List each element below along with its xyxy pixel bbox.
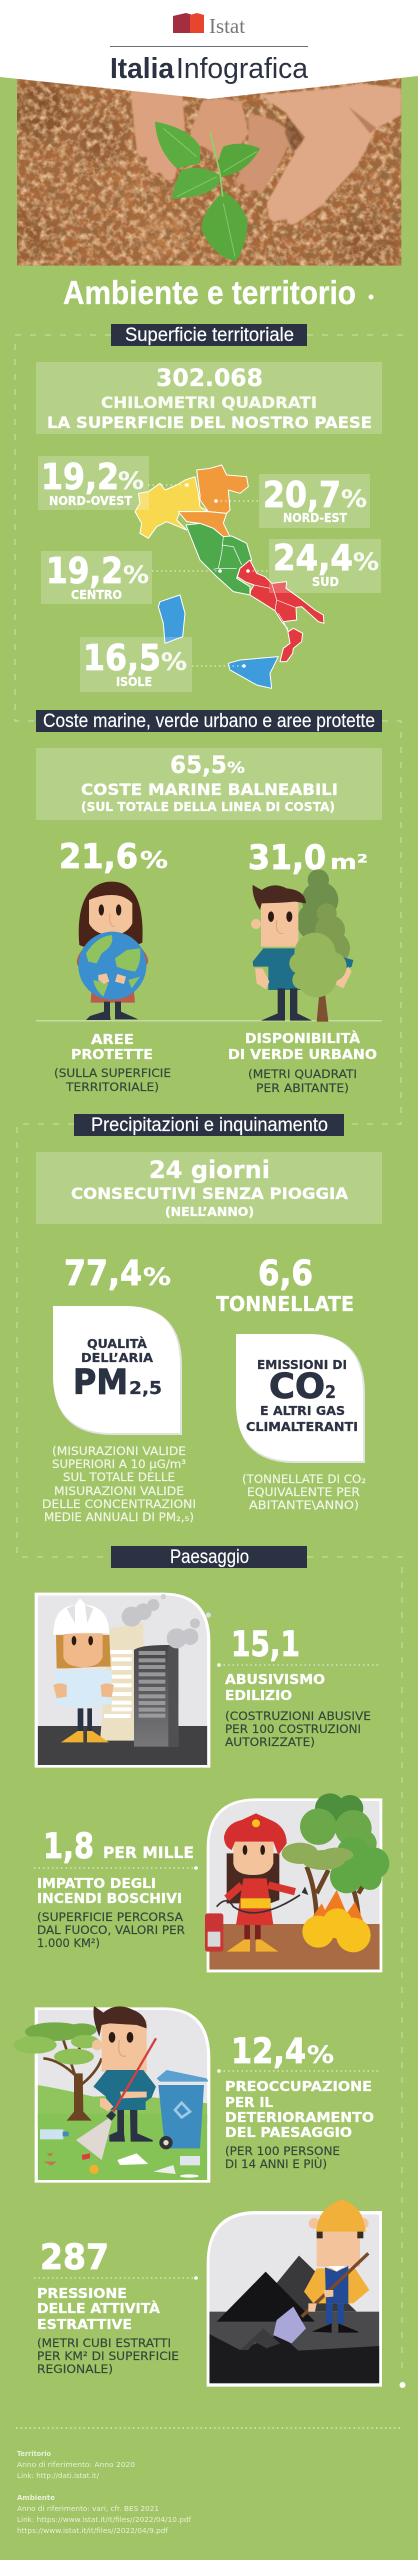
stat: 15,1 abusivismo edilizio: (COSTRUZIONI ABUSIVE	[225, 1709, 371, 1723]
card: qualita dell'aria PM2,5: DELL’ARIA	[81, 1350, 153, 1365]
panel: 65,5% coste balneabili: COSTE MARINE BALNEABILI	[81, 780, 338, 799]
stat: centro: 19,2	[46, 551, 123, 592]
stat: 287 pressione attivita estrattive: REGIONALE)	[37, 2362, 113, 2376]
card: qualita dell'aria PM2,5: QUALITÀ	[87, 1336, 147, 1351]
stat: nord-ovest	[38, 456, 149, 510]
stat: 1,8 per mille incendi boschivi: IMPATTO DEGLI	[37, 1877, 156, 1892]
footer: sources: https://www.istat.it/it/files//2022/04/9.pdf	[17, 2527, 169, 2535]
card: emissioni CO2: EMISSIONI DI	[257, 1357, 347, 1372]
note: PM2,5: SUPERIORI A 10 µG/m³	[52, 1457, 186, 1471]
stat: 12,4% preoccupazione: (PER 100 PERSONE	[225, 2144, 340, 2158]
stat: 1,8 per mille incendi boschivi: DAL FUOCO, VALORI PER	[37, 1923, 185, 1937]
stat: 31,0 m2: 31,0	[248, 838, 326, 878]
icon: girl hugging the globe	[77, 882, 148, 1020]
label: disponibilita di verde urbano	[228, 1031, 377, 1095]
stat: 6,6 tonnellate: TONNELLATE	[216, 1292, 354, 1316]
stat: 287 pressione attivita estrattive: (METRI CUBI ESTRATTI	[37, 2336, 171, 2350]
panel: 24 giorni: CONSECUTIVI SENZA PIOGGIA	[71, 1184, 349, 1203]
stat: nord-ovest: NORD-OVEST	[49, 494, 133, 508]
label: disponibilita di verde urbano: DI VERDE URBANO	[228, 1048, 377, 1063]
panel: 302.068 km2: 302.068	[156, 364, 263, 392]
card: emissioni CO2: 2	[325, 1382, 336, 1403]
stat: 12,4% preoccupazione: DETERIORAMENTO	[225, 2111, 374, 2126]
stat: nord-est: 20,7	[263, 475, 341, 516]
label: aree protette: PROTETTE	[71, 1048, 153, 1063]
illustration: miner with shovel and coal heaps	[207, 2199, 382, 2387]
heading: paesaggio	[111, 1546, 307, 1568]
label: disponibilita di verde urbano: (METRI QUADRATI	[248, 1067, 357, 1081]
footer: sources: Anno di riferimento: Anno 2020	[17, 2461, 135, 2469]
logo: Istat	[173, 13, 245, 38]
white header band with logo	[0, 0, 418, 99]
card: qualita dell'aria PM2,5	[53, 1306, 182, 1435]
stat: nord-est: NORD-EST	[283, 511, 348, 525]
stat: 12,4% preoccupazione	[217, 2032, 381, 2171]
stat: 287 pressione attivita estrattive: ESTRATTIVE	[37, 2318, 132, 2333]
note: CO2	[242, 1472, 366, 1512]
footer: sources: Link: https://www.istat.it/it/files//2022/04/10.pdf	[17, 2516, 192, 2524]
card: emissioni CO2: CO	[269, 1367, 325, 1407]
stat: 12,4% preoccupazione: DEL PAESAGGIO	[225, 2126, 352, 2141]
title: Ambiente e territorio	[63, 274, 356, 311]
panel: 302.068 km2	[36, 362, 382, 434]
note: PM2,5: (MISURAZIONI VALIDE	[52, 1444, 186, 1458]
section: precipitazioni e inquinamento	[36, 1114, 382, 1524]
stat: sud: SUD	[312, 575, 339, 589]
stat: 6,6 tonnellate	[216, 1254, 354, 1316]
note: PM2,5	[42, 1444, 196, 1524]
stat: 12,4% preoccupazione: %	[307, 2041, 334, 2069]
stat: nord-ovest: %	[118, 467, 144, 495]
logo: ItaliaInfografica	[110, 53, 309, 85]
stat: 12,4% preoccupazione: DI 14 ANNI E PIÙ)	[225, 2156, 327, 2171]
label: aree protette: (SULLA SUPERFICIE	[54, 1066, 171, 1080]
note: PM2,5: SUL TOTALE DELLE	[63, 1470, 175, 1484]
stat: 287 pressione attivita estrattive: 287	[40, 2238, 109, 2278]
panel: 65,5% coste balneabili	[36, 748, 382, 820]
stat: 77,4%: %	[143, 1263, 171, 1291]
stat: 1,8 per mille incendi boschivi	[34, 1827, 198, 1950]
stat: 77,4%: 77,4	[64, 1254, 142, 1294]
stat: nord-est: %	[341, 485, 367, 513]
stat: 21,6%: 21,6	[59, 837, 138, 877]
stat: isole: %	[161, 648, 187, 676]
stat: 15,1 abusivismo edilizio: 15,1	[231, 1625, 300, 1665]
stat: 1,8 per mille incendi boschivi: 1,8	[43, 1827, 94, 1867]
stat: isole	[80, 637, 192, 692]
stat: isole: ISOLE	[116, 675, 152, 689]
panel: 302.068 km2: CHILOMETRI QUADRATI	[101, 393, 317, 412]
footer: sources: Ambiente	[17, 2494, 55, 2502]
stat: 1,8 per mille incendi boschivi: PER MILLE	[103, 1843, 194, 1862]
stat: 6,6 tonnellate: 6,6	[258, 1254, 313, 1294]
logo: Istat: Istat	[209, 14, 245, 38]
stat: 31,0 m2	[248, 838, 368, 878]
panel: 24 giorni: 24 giorni	[149, 1156, 270, 1184]
note: PM2,5: DELLE CONCENTRAZIONI	[42, 1497, 196, 1511]
stat: nord-est	[259, 474, 370, 528]
stat: 287 pressione attivita estrattive: PRESSIONE	[37, 2287, 127, 2302]
stat: 15,1 abusivismo edilizio: EDILIZIO	[225, 1689, 292, 1704]
label: disponibilita di verde urbano: DISPONIBILITÀ	[245, 1031, 360, 1047]
stat: 21,6%: %	[140, 848, 168, 874]
footer: sources	[17, 2450, 192, 2535]
note: PM2,5: MEDIE ANNUALI DI PM₂,₅)	[44, 1510, 194, 1524]
panel: 302.068 km2: LA SUPERFICIE DEL NOSTRO PAESE	[47, 413, 372, 432]
label: aree protette	[54, 1033, 171, 1094]
heading: paesaggio: Paesaggio	[170, 1547, 249, 1568]
footer: sources: Link: http://dati.istat.it/	[17, 2472, 100, 2480]
illustration: engineer and buildings	[35, 1593, 211, 1768]
card: qualita dell'aria PM2,5: 2,5	[129, 1378, 162, 1399]
stat: isole: 16,5	[83, 638, 161, 679]
heading: coste marine: Coste marine, verde urbano e aree protette	[43, 711, 375, 732]
note: CO2: EQUIVALENTE PER	[247, 1485, 360, 1499]
stat: sud: 24,4	[273, 538, 353, 579]
stat: 15,1 abusivismo edilizio: ABUSIVISMO	[225, 1673, 325, 1688]
illustration: boy sweeping litter	[13, 2006, 210, 2183]
stat: nord-ovest: 19,2	[41, 457, 119, 498]
stat: 287 pressione attivita estrattive	[34, 2238, 198, 2376]
stat: 31,0 m2: m²	[330, 850, 368, 874]
panel: 24 giorni: (NELL’ANNO)	[165, 1205, 254, 1219]
logo: ItaliaInfografica: Infografica	[176, 53, 309, 85]
connector lines	[148, 483, 270, 668]
card: emissioni CO2: CLIMALTERANTI	[246, 1419, 358, 1434]
heading: superficie territoriale: Superficie territoriale	[125, 325, 294, 346]
card: emissioni CO2: E ALTRI GAS	[260, 1403, 345, 1418]
card: qualita dell'aria PM2,5: PM	[73, 1363, 128, 1403]
card: emissioni CO2	[236, 1334, 365, 1463]
label: aree protette: AREE	[91, 1033, 134, 1048]
note: CO2: (TONNELLATE DI CO₂	[242, 1472, 366, 1486]
stat: centro: CENTRO	[71, 588, 122, 602]
section: paesaggio	[13, 1546, 406, 2388]
stat: centro	[41, 551, 152, 604]
stat: 12,4% preoccupazione: PREOCCUPAZIONE	[225, 2080, 372, 2095]
note: PM2,5: MISURAZIONI VALIDE	[54, 1484, 184, 1498]
panel: 65,5% coste balneabili: %	[227, 758, 245, 777]
label: disponibilita di verde urbano: PER ABITANTE)	[256, 1081, 349, 1095]
icon: boy with tree	[251, 869, 353, 1022]
section: superficie territoriale	[36, 324, 382, 692]
section: coste marine, verde urbano e aree protette	[36, 710, 382, 1095]
stat: 12,4% preoccupazione: PER IL	[225, 2096, 273, 2111]
stat: sud	[269, 538, 381, 593]
note: CO2: ABITANTE\ANNO)	[249, 1498, 359, 1512]
panel: 24 giorni	[36, 1152, 382, 1224]
panel: 65,5% coste balneabili: 65,5	[170, 751, 227, 779]
illustration: firefighter and burning trees	[205, 1793, 389, 1972]
map of Italy by macro area	[135, 465, 324, 688]
stat: 15,1 abusivismo edilizio: PER 100 COSTRUZIONI	[225, 1722, 361, 1736]
stat: 287 pressione attivita estrattive: PER KM² DI SUPERFICIE	[37, 2349, 179, 2363]
panel: 65,5% coste balneabili: (SUL TOTALE DELLA LINEA DI COSTA)	[81, 799, 335, 814]
stat: 1,8 per mille incendi boschivi: 1.000 KM²)	[37, 1936, 100, 1950]
label: aree protette: TERRITORIALE)	[65, 1080, 159, 1094]
footer: sources: Territorio	[17, 2450, 51, 2458]
logo: ItaliaInfografica: Italia	[110, 53, 175, 85]
header photo: hands planting a seedling in soil	[17, 78, 402, 266]
heading: precipitazioni: Precipitazioni e inquinamento	[91, 1115, 328, 1136]
stat: 12,4% preoccupazione: 12,4	[231, 2032, 306, 2072]
stat: sud: %	[353, 548, 379, 576]
stat: centro: %	[123, 561, 149, 589]
stat: 1,8 per mille incendi boschivi: INCENDI BOSCHIVI	[37, 1892, 182, 1907]
stat: 15,1 abusivismo edilizio	[217, 1625, 381, 1749]
footer: sources: Anno di riferimento: vari, cfr. BES 2021	[17, 2505, 159, 2513]
stat: 15,1 abusivismo edilizio: AUTORIZZATE)	[225, 1735, 315, 1749]
stat: 287 pressione attivita estrattive: DELLE ATTIVITÀ	[37, 2301, 160, 2317]
stat: 1,8 per mille incendi boschivi: (SUPERFICIE PERCORSA	[37, 1910, 183, 1924]
